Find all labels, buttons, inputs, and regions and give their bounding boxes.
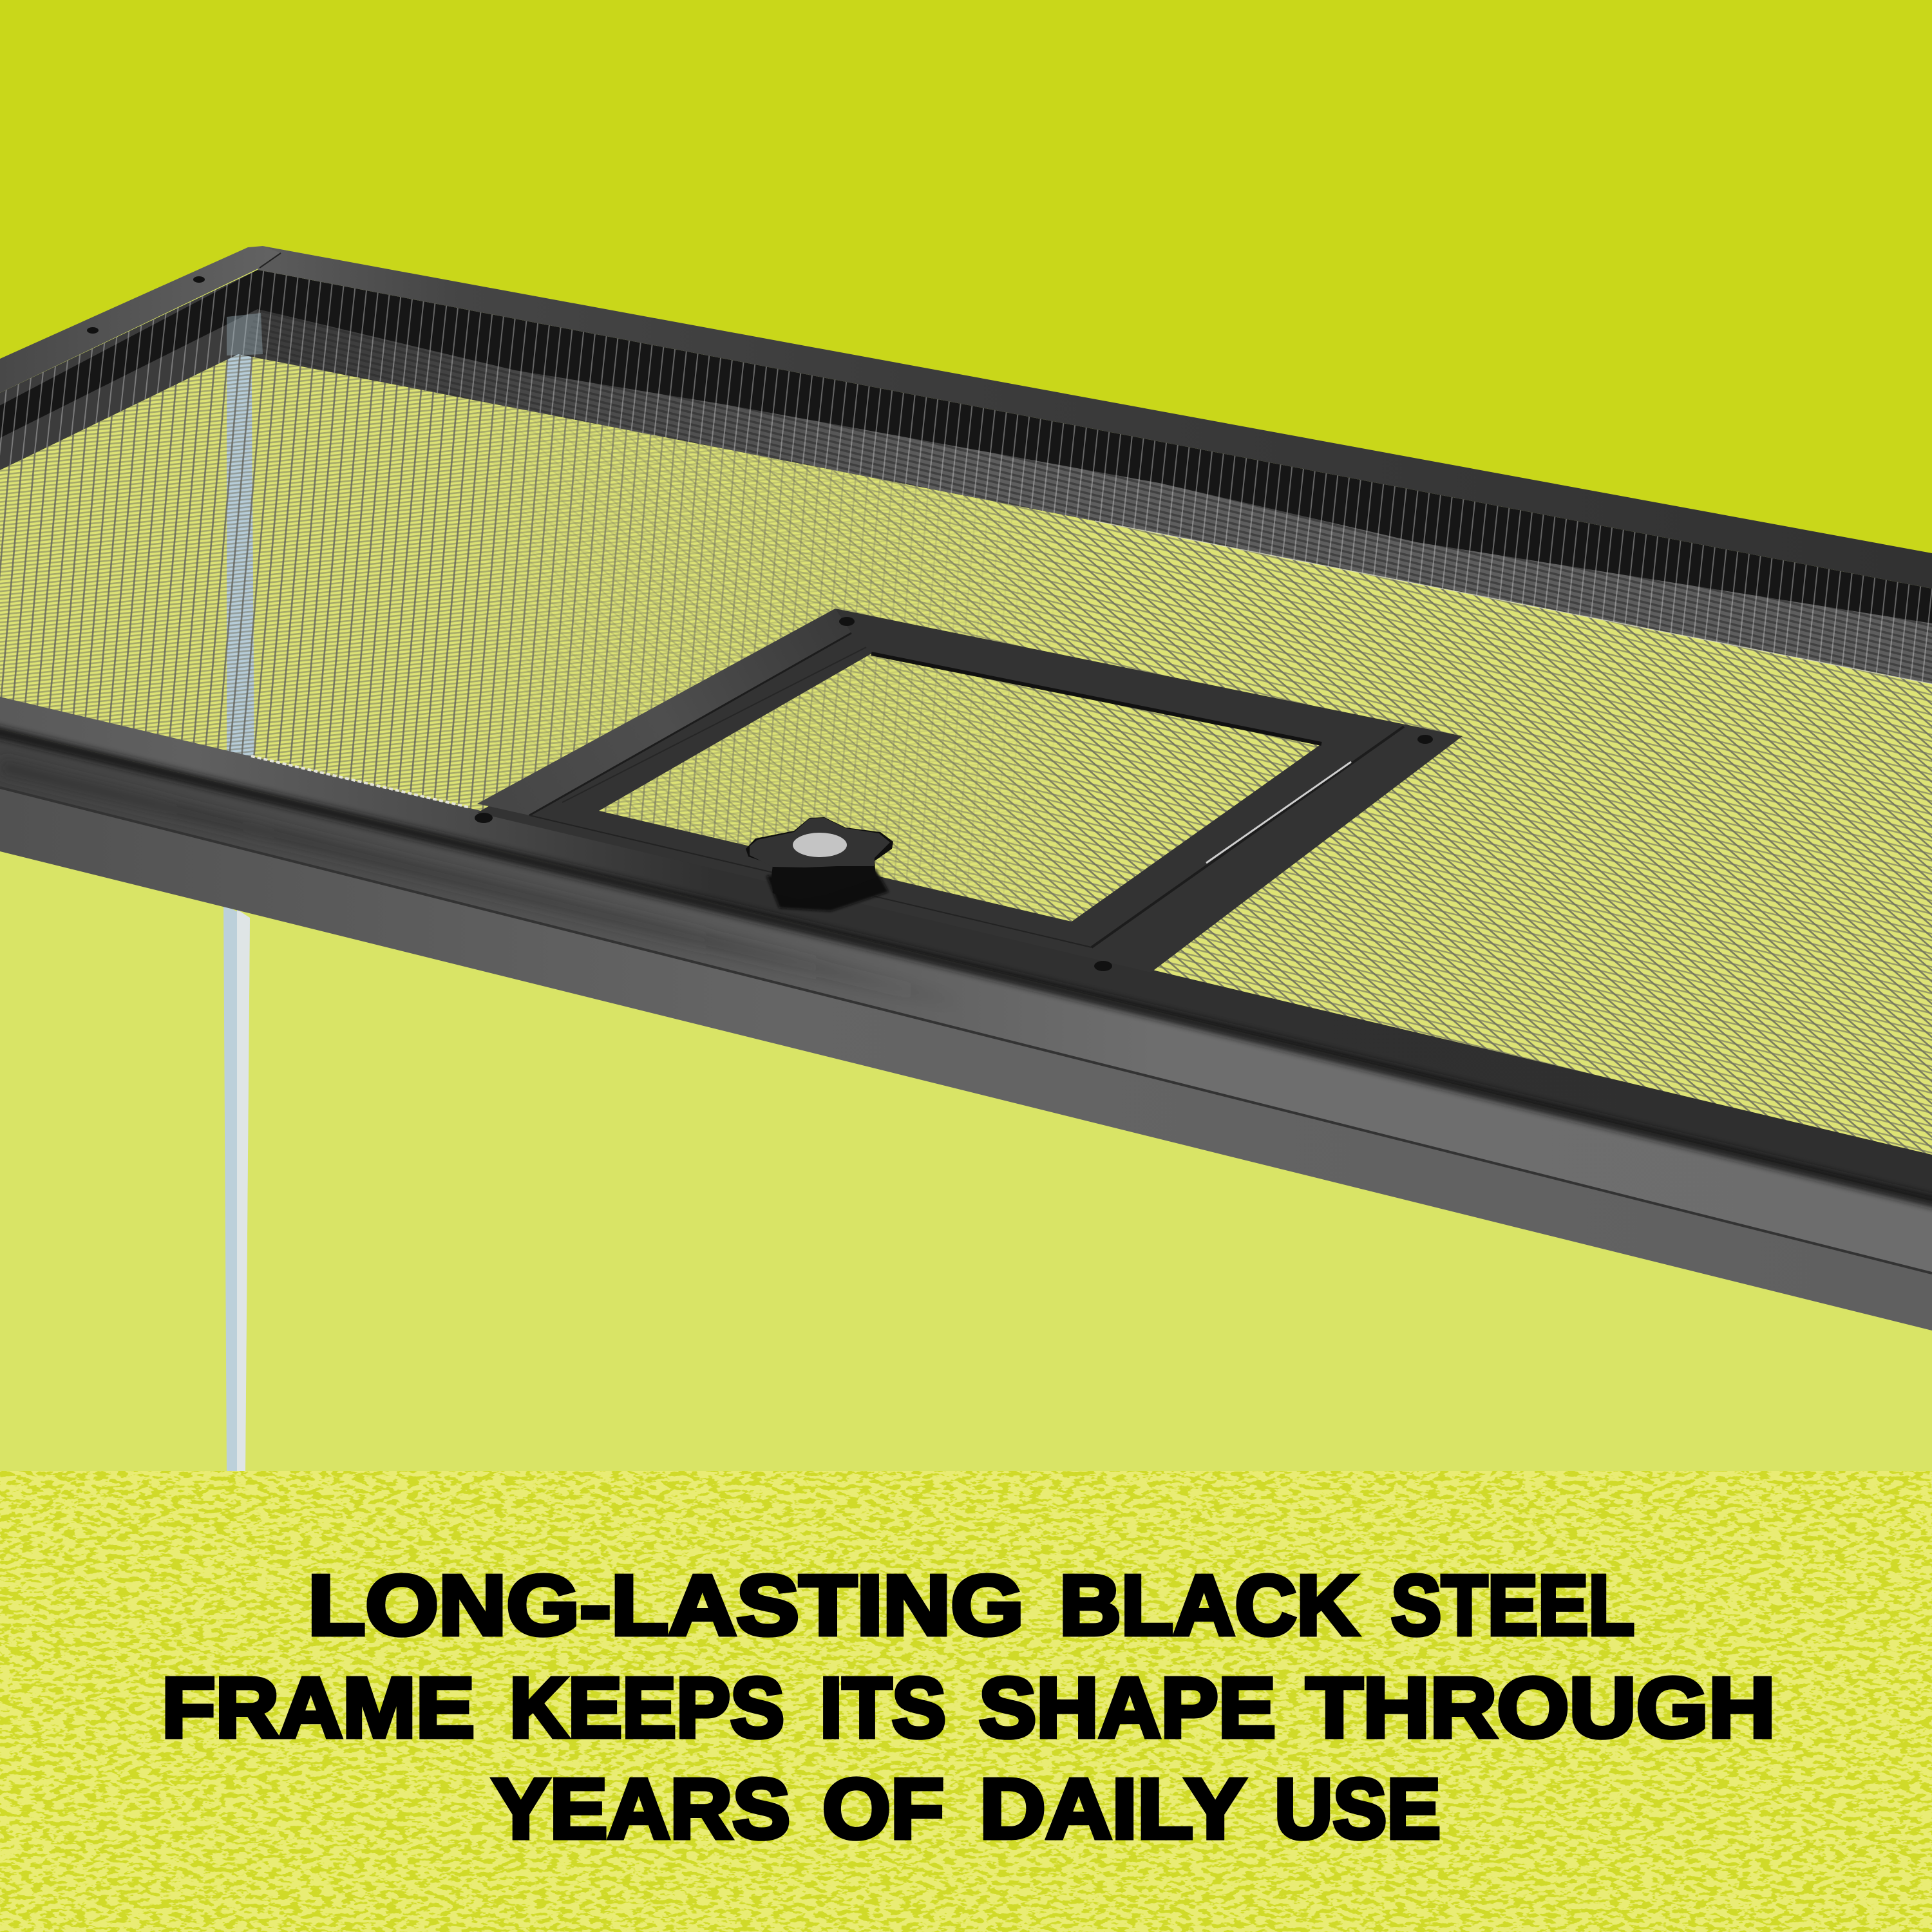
window frame xyxy=(477,609,1463,972)
caption line 3: YEARS xyxy=(492,1761,790,1856)
glass rod seen through mesh xyxy=(227,303,254,760)
rail top band xyxy=(0,697,1932,1201)
caption heading xyxy=(162,1558,1776,1856)
caption line 3: OF xyxy=(822,1761,944,1856)
caption line 1: BLACK xyxy=(1059,1558,1358,1653)
rail lower face xyxy=(0,788,1932,1331)
caption line 2: KEEPS xyxy=(509,1660,784,1755)
caption line 1: STEEL xyxy=(1391,1558,1634,1653)
caption line 3: USE xyxy=(1274,1761,1441,1856)
ventilation access window xyxy=(475,609,1463,972)
caption line 2: THROUGH xyxy=(1306,1660,1776,1755)
dark shadow band under back frame xyxy=(0,270,1932,623)
fold shadow xyxy=(0,726,1932,1208)
mesh weave xyxy=(0,354,1932,1154)
caption line 2: ITS xyxy=(820,1660,946,1755)
rod head behind wall xyxy=(227,313,263,355)
star knob latch xyxy=(746,817,893,911)
pale edge where wall meets floor xyxy=(1095,521,1932,684)
vertical wires xyxy=(0,270,1932,682)
pale wire edge along rail xyxy=(251,756,470,808)
window screws xyxy=(475,617,1433,971)
caption line 1: LONG-LASTING xyxy=(308,1558,1024,1653)
front rail xyxy=(0,697,1932,1331)
right seam with highlight xyxy=(1092,726,1404,947)
knob cap xyxy=(793,833,847,857)
knob shadow xyxy=(766,869,889,911)
caption line 3: DAILY xyxy=(980,1761,1244,1856)
opening shadow xyxy=(871,654,1321,744)
left frame strip xyxy=(477,609,851,815)
background: lime upper and lighter lower field xyxy=(0,0,1932,1471)
back frame rail xyxy=(258,246,1932,589)
knob top xyxy=(750,818,890,867)
left frame rail with screws xyxy=(0,246,281,393)
rail upper face xyxy=(0,729,1932,1273)
back wall mesh panel xyxy=(0,270,1932,685)
knob body xyxy=(746,817,893,900)
glass support rod below the rail xyxy=(223,905,250,1471)
caption line 2: SHAPE xyxy=(979,1660,1276,1755)
lighter lower wall mesh xyxy=(474,361,1932,684)
caption line 2: FRAME xyxy=(162,1660,475,1755)
mesh lid floor xyxy=(0,354,1932,1155)
rail crease line xyxy=(0,788,1932,1273)
mid-face shadow xyxy=(0,766,966,1005)
textured caption band xyxy=(0,1471,1932,1932)
